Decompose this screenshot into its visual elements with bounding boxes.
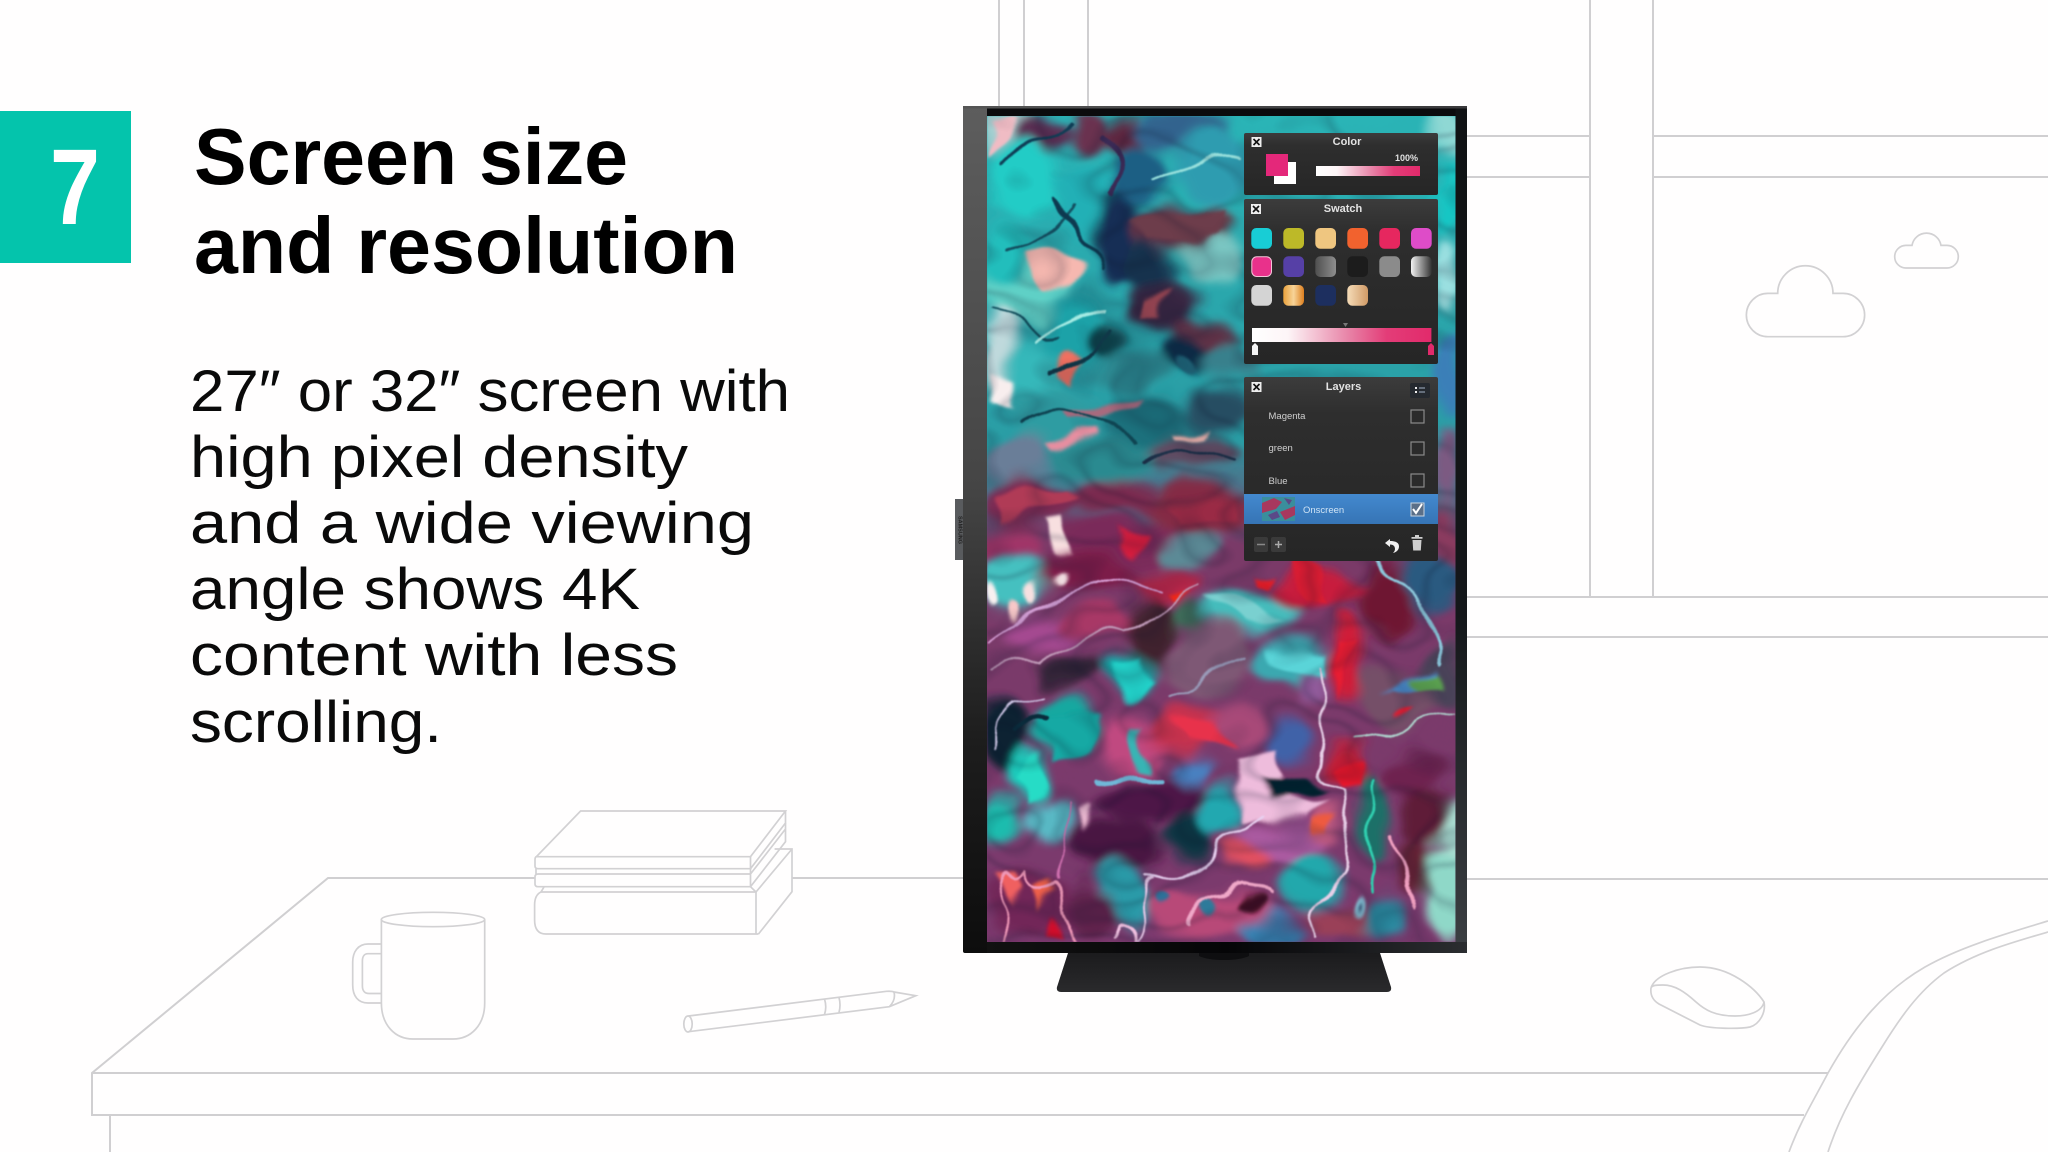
gradient editor	[1252, 323, 1434, 355]
icon: layer list button	[1410, 383, 1430, 398]
icon: checked box	[1411, 503, 1424, 516]
heading: Color: Color	[1333, 136, 1362, 148]
layer row: Blue: Blue	[1268, 476, 1288, 487]
icon: chair	[1789, 921, 2048, 1152]
window frame line drawing	[999, 0, 2048, 637]
number badge	[0, 111, 131, 263]
body text	[190, 359, 790, 755]
title	[194, 112, 738, 290]
layer row: Onscreen selected: Onscreen	[1303, 505, 1344, 516]
artwork: lower blobs	[978, 553, 1478, 947]
body text: and a wide viewing	[190, 491, 754, 556]
layer row: green: green	[1268, 443, 1293, 454]
artwork: upper blobs	[974, 107, 1461, 570]
monitor frame	[963, 106, 1467, 953]
icon: small cloud	[1895, 233, 1958, 268]
icon: coffee mug	[353, 912, 485, 1039]
icon: close swatch	[1251, 204, 1261, 214]
heading: Swatch: Swatch	[1324, 203, 1363, 215]
desk line drawing	[92, 878, 2048, 1152]
colour swatches	[1251, 228, 1432, 306]
side button with logo: SAMSUNG	[956, 516, 962, 544]
number badge: 7	[50, 126, 100, 247]
layer row: Onscreen selected	[1244, 494, 1438, 524]
body text: high pixel density	[190, 425, 688, 490]
panel: Layers	[1244, 377, 1438, 561]
body text: 27″ or 32″ screen with	[190, 359, 790, 424]
opacity slider	[1316, 166, 1420, 176]
title: and resolution	[194, 201, 738, 290]
layer row: Blue	[1268, 474, 1424, 487]
layer thumbnail	[1262, 497, 1295, 521]
icon: close color	[1252, 137, 1262, 147]
icon: large cloud	[1746, 266, 1865, 337]
monitor	[955, 106, 1478, 992]
opacity value: 100%	[1395, 153, 1418, 163]
layer row: green	[1268, 442, 1424, 455]
stand base	[1057, 953, 1391, 992]
body text: angle shows 4K	[190, 557, 640, 622]
title: Screen size	[194, 112, 628, 201]
layer row: Magenta: Magenta	[1268, 411, 1306, 422]
heading: Layers: Layers	[1326, 381, 1361, 393]
stand neck	[1199, 953, 1249, 960]
icon: foreground and background colour	[1266, 154, 1296, 184]
side button with logo	[955, 499, 965, 560]
panel: Swatch	[1244, 199, 1438, 364]
icon: stylus pen	[684, 991, 916, 1032]
icon: close layers	[1252, 382, 1262, 392]
layer row: Magenta	[1268, 410, 1424, 423]
layer toolbar	[1254, 535, 1422, 553]
body text: content with less	[190, 623, 678, 688]
body text: scrolling.	[190, 690, 442, 755]
icon: stack of books	[535, 811, 792, 934]
panel: Color	[1244, 133, 1438, 195]
screen artwork	[974, 107, 1478, 947]
icon: computer mouse	[1651, 967, 1764, 1028]
artwork: dark marbling veins	[987, 116, 1456, 942]
